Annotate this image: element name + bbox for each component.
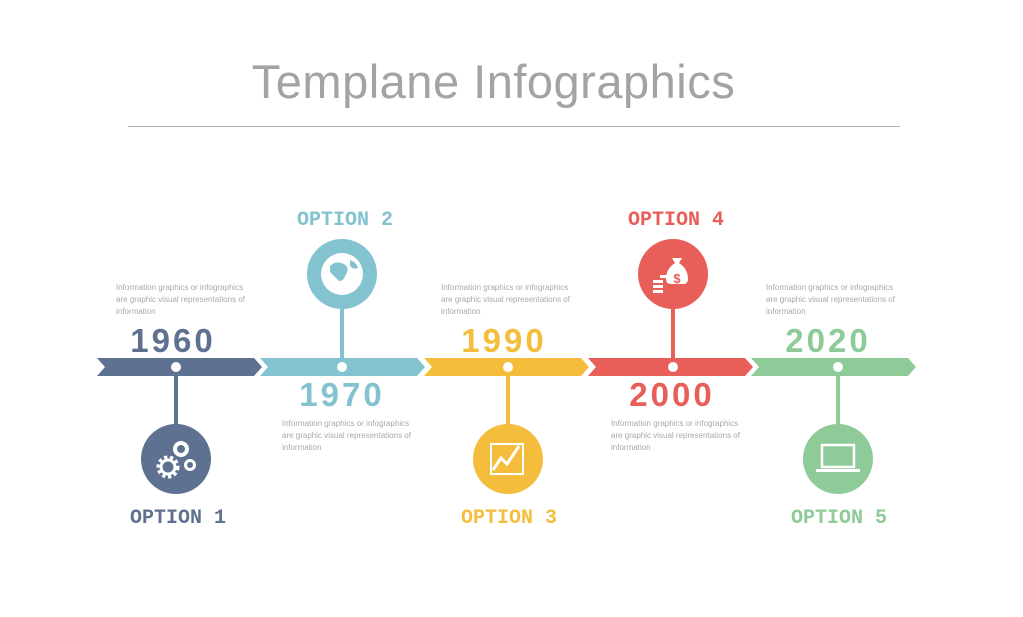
title: Templane Infographics [252,55,735,108]
text: 1960: Information graphics or infographics are graphic visual representations of information [116,283,245,316]
label option 4: OPTION 4 [628,209,724,232]
icon: gears [141,424,211,494]
year 1970: 1970 [299,376,385,413]
icon: money bag [638,239,708,309]
year 1960: 1960 [130,322,216,359]
icon: chart [473,424,543,494]
text: 2020: Information graphics or infographics are graphic visual representations of information [766,283,895,316]
label option 1: OPTION 1 [130,507,226,530]
year 1990: 1990 [461,322,547,359]
text: 1990: Information graphics or infographics are graphic visual representations of information [441,283,570,316]
label option 5: OPTION 5 [791,507,887,530]
icon: globe [307,239,377,309]
icon: laptop [803,424,873,494]
connectors [176,300,838,430]
text: 2000: Information graphics or infographics are graphic visual representations of information [611,419,740,452]
label option 2: OPTION 2 [297,209,393,232]
year 2000: 2000 [629,376,715,413]
arrow segment 5 [751,358,916,376]
text: 1970: Information graphics or infographics are graphic visual representations of information [282,419,411,452]
arrow segment 2 [260,358,425,376]
arrow segment 4 [588,358,753,376]
year 2020: 2020 [785,322,871,359]
label option 3: OPTION 3 [461,507,557,530]
icon: money bag: $ [673,271,681,286]
arrow segment 1 [97,358,262,376]
arrow segment 3 [424,358,589,376]
